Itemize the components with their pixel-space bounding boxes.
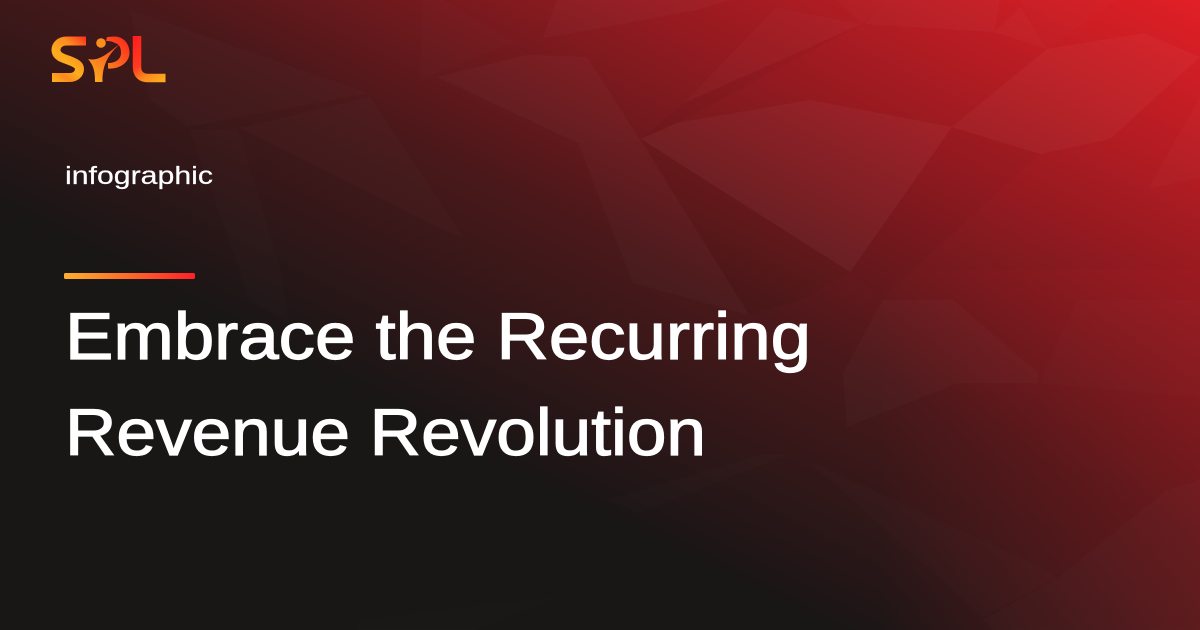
logo: SPL [52,36,166,82]
logo letter S [52,41,86,78]
category label: infographic [65,162,213,190]
background: lower right red glow [880,270,1200,630]
title [65,299,811,469]
title line 1: Embrace the Recurring [65,299,811,373]
accent bar [64,273,195,279]
logo letter L [137,36,166,78]
title line 2: Revenue Revolution [65,395,706,469]
background: darker facets [641,24,1040,315]
logo letter P [88,36,130,82]
